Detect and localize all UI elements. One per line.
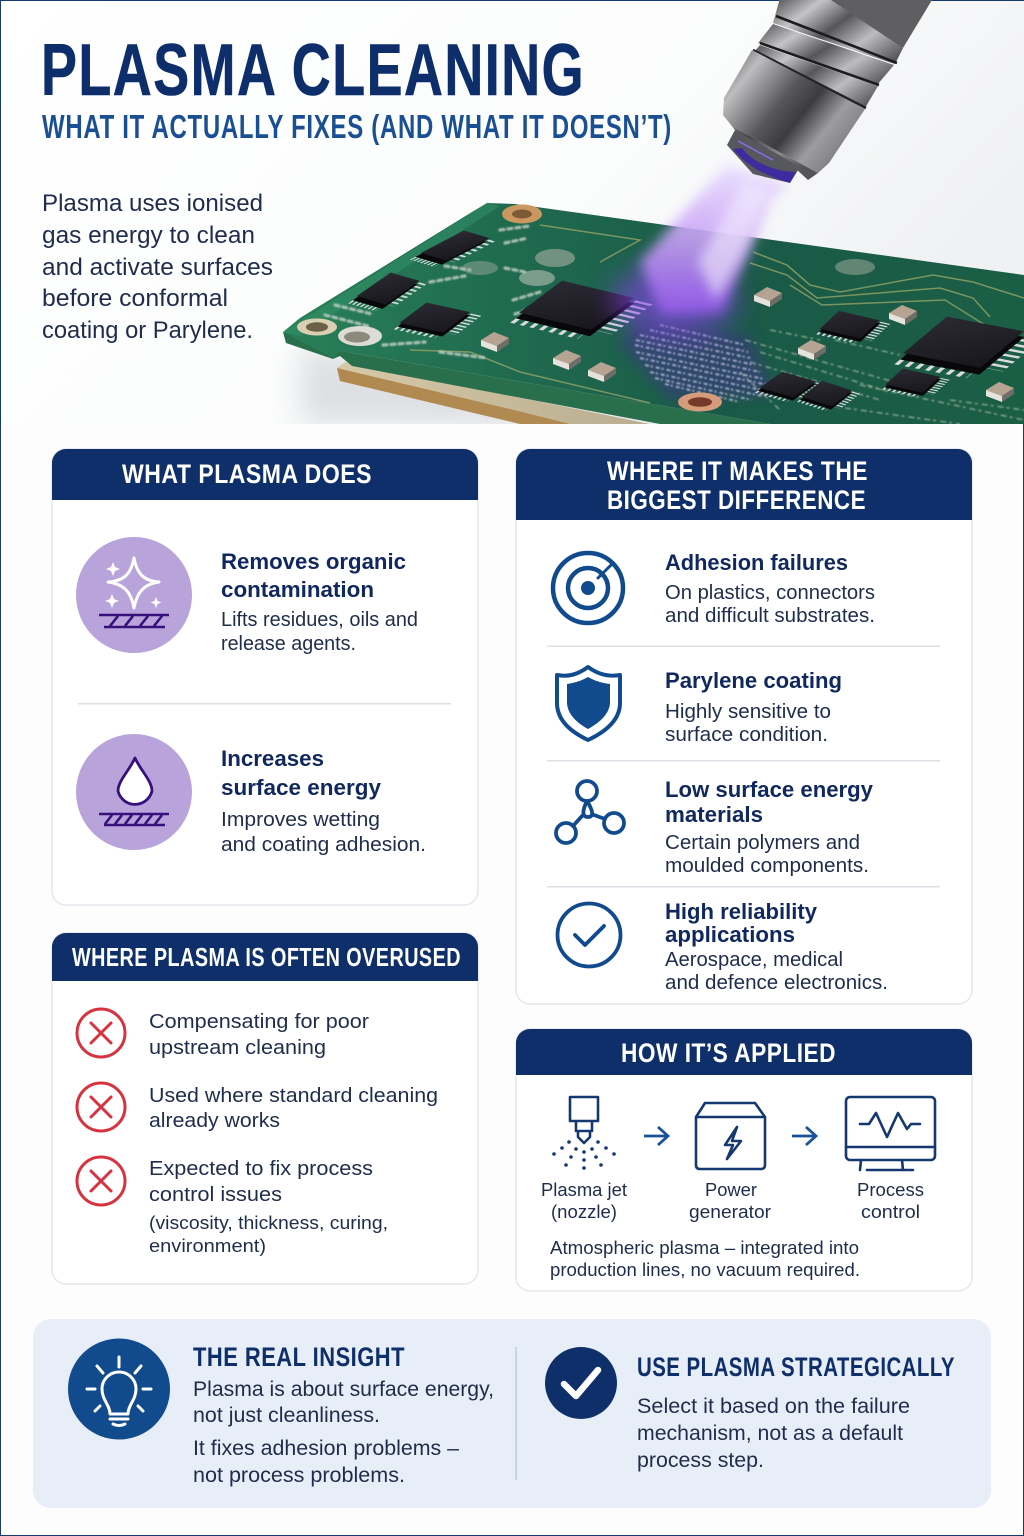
arrow 2 — [792, 1127, 816, 1145]
text: parylene coating: surface condition. — [665, 724, 828, 746]
text: standard cleaning — [149, 1085, 438, 1132]
label: plasma jet — [541, 1179, 627, 1222]
icon: check badge — [545, 1347, 617, 1419]
text: process control: (viscosity, thickness, curing, — [149, 1212, 388, 1233]
icon: plasma jet nozzle — [552, 1097, 616, 1170]
text: the real insight: not process problems. — [193, 1463, 405, 1487]
text: adhesion failures: On plastics, connectors — [665, 582, 875, 604]
text: increases surface energy: Improves wetting — [221, 809, 380, 831]
text: process control: environment) — [149, 1235, 266, 1256]
text: high reliability applications: Aerospace, medical — [665, 949, 843, 971]
text: standard cleaning: Used where standard cleaning — [149, 1085, 438, 1107]
icon: water drop on surface — [76, 734, 192, 850]
panel: where it makes the biggest difference — [516, 449, 972, 1004]
plasma jet — [613, 165, 787, 336]
text: upstream cleaning — [149, 1011, 369, 1059]
heading — [607, 456, 868, 515]
intro text: coating or Parylene. — [42, 317, 253, 344]
board chips — [351, 230, 1024, 411]
text: upstream cleaning: upstream cleaning — [149, 1037, 326, 1059]
label: power generator: Power — [705, 1179, 757, 1200]
icon: cross 3 — [77, 1157, 125, 1205]
label: process control: Process — [857, 1179, 924, 1200]
text: the real insight: It fixes adhesion problems – — [193, 1436, 459, 1460]
label: process control — [857, 1179, 924, 1222]
intro text: Plasma uses ionised — [42, 190, 263, 217]
text: high reliability applications: applications — [665, 922, 795, 947]
arrow 1 — [644, 1127, 668, 1145]
heading: BIGGEST DIFFERENCE — [607, 485, 866, 515]
icon: power generator box — [696, 1103, 765, 1169]
heading: WHERE IT MAKES THE — [607, 456, 868, 486]
text: increases surface energy: and coating adhesion. — [221, 834, 426, 856]
text: removes organic contamination: contamination — [221, 577, 374, 602]
text: low surface energy materials: Low surface energy — [665, 777, 873, 802]
icon: cross 1 — [77, 1009, 125, 1057]
heading: WHAT PLASMA DOES — [122, 459, 372, 489]
text: high reliability applications: High reliability — [665, 899, 817, 924]
text: adhesion failures: Adhesion failures — [665, 550, 848, 575]
subtitle: WHAT IT ACTUALLY FIXES (AND WHAT IT DOESN’T) — [42, 108, 672, 145]
text: parylene coating: Highly sensitive to — [665, 701, 831, 723]
panel: bottom insight band — [33, 1319, 991, 1508]
title: PLASMA CLEANING — [41, 30, 585, 111]
caption: Atmospheric plasma – integrated into — [550, 1237, 859, 1258]
text: use plasma strategically: Select it based on the failure — [637, 1394, 910, 1418]
text: the real insight: THE REAL INSIGHT — [193, 1342, 405, 1372]
text: standard cleaning: already works — [149, 1110, 280, 1132]
caption: production lines, no vacuum required. — [550, 1259, 860, 1280]
silver pads left — [325, 226, 545, 358]
intro text — [42, 190, 273, 344]
icon: molecule network — [556, 781, 624, 843]
text: removes organic contamination: Lifts residues, oils and — [221, 609, 418, 631]
text: use plasma strategically — [637, 1352, 955, 1472]
text: low surface energy materials — [665, 777, 873, 877]
text: process control: Expected to fix process — [149, 1158, 373, 1180]
text: removes organic contamination: Removes organic — [221, 549, 406, 574]
text: process control: control issues — [149, 1184, 282, 1206]
icon: cross 2 — [77, 1083, 125, 1131]
text: use plasma strategically: mechanism, not as a default — [637, 1421, 903, 1445]
text: use plasma strategically: process step. — [637, 1448, 764, 1472]
label: power generator: generator — [689, 1201, 771, 1222]
panel header — [516, 449, 972, 520]
icon: light bulb — [68, 1338, 170, 1440]
panel header — [52, 933, 478, 981]
caption — [550, 1237, 860, 1280]
panel: where plasma is often overused — [52, 933, 478, 1284]
text: the real insight — [193, 1342, 494, 1487]
text: parylene coating: Parylene coating — [665, 668, 842, 693]
board edge — [283, 332, 770, 424]
icon: target — [553, 553, 623, 623]
board vias — [297, 204, 722, 412]
heading: HOW IT’S APPLIED — [621, 1038, 836, 1068]
board surface — [280, 200, 1024, 424]
text: adhesion failures — [665, 550, 875, 627]
text: upstream cleaning: Compensating for poor — [149, 1011, 369, 1033]
panel header — [52, 449, 478, 500]
intro text: and activate surfaces — [42, 254, 273, 281]
intro text: before conformal — [42, 285, 228, 312]
panel: how it's applied — [516, 1029, 972, 1291]
label: plasma jet: Plasma jet — [541, 1179, 627, 1200]
metal plate under board — [337, 362, 650, 424]
text: increases surface energy: surface energy — [221, 775, 381, 800]
label: power generator — [689, 1179, 771, 1222]
text: process control — [149, 1158, 388, 1256]
label: plasma jet: (nozzle) — [551, 1201, 617, 1222]
text: removes organic contamination — [221, 549, 418, 655]
text: increases surface energy — [221, 746, 426, 856]
nozzle — [723, 0, 932, 183]
icon: shield — [557, 667, 620, 740]
icon: sparkle on surface — [76, 537, 192, 653]
text: the real insight: not just cleanliness. — [193, 1403, 380, 1427]
icon: check circle — [558, 904, 620, 966]
heading: WHERE PLASMA IS OFTEN OVERUSED — [72, 942, 461, 972]
label: process control: control — [861, 1201, 920, 1222]
text: low surface energy materials: materials — [665, 802, 763, 827]
dense solder texture — [620, 320, 775, 400]
text: the real insight: Plasma is about surface energy, — [193, 1377, 494, 1401]
panel header — [516, 1029, 972, 1075]
text: high reliability applications: and defence electronics. — [665, 972, 888, 994]
panel: what plasma does — [52, 449, 478, 905]
text: parylene coating — [665, 668, 842, 746]
traces — [410, 225, 1024, 403]
text: high reliability applications — [665, 899, 888, 994]
text: low surface energy materials: Certain polymers and — [665, 832, 860, 854]
text: increases surface energy: Increases — [221, 746, 324, 771]
text: adhesion failures: and difficult substrates. — [665, 605, 875, 627]
text: removes organic contamination: release agents. — [221, 633, 356, 655]
icon: process control monitor — [846, 1097, 935, 1170]
text: low surface energy materials: moulded components. — [665, 855, 869, 877]
intro text: gas energy to clean — [42, 222, 255, 249]
hero image: plasma nozzle over circuit board — [283, 0, 1024, 424]
